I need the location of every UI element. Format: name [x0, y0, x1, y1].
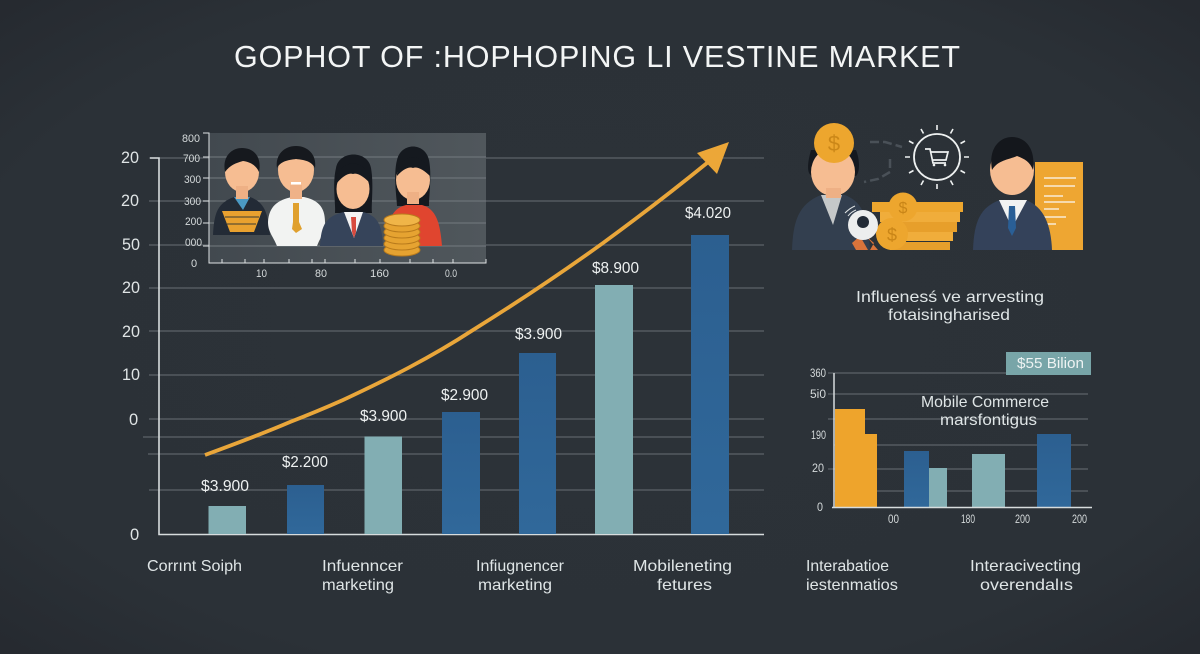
bar value labels: $4.020 — [685, 205, 731, 222]
inset axis labels: 200 — [185, 216, 202, 228]
growth arrow — [205, 142, 729, 455]
small chart axis labels: 200 — [1072, 514, 1087, 526]
category labels — [147, 558, 732, 594]
small chart category labels: iestenmatios — [806, 577, 898, 594]
illustration: investors and coins — [792, 123, 1083, 250]
gold stack: $ — [887, 225, 897, 245]
white badge — [845, 206, 878, 250]
inset axis labels — [182, 133, 457, 280]
inset axis labels: 000 — [185, 237, 202, 249]
bars — [208, 235, 729, 534]
small chart caption: marsfontigus — [940, 412, 1037, 429]
bar value labels: $3.900 — [360, 408, 407, 425]
category labels: marketing — [478, 577, 552, 594]
small chart caption — [921, 394, 1049, 429]
main bar chart — [121, 149, 764, 594]
small chart axis labels — [810, 368, 1087, 526]
y axis labels: 20 — [122, 323, 140, 341]
inset axis labels: 700 — [183, 153, 200, 165]
gold stack — [872, 192, 963, 250]
inset axis labels: 160 — [370, 268, 389, 280]
inset axis labels: 0 — [191, 258, 197, 270]
callout badge: $55 Bilion — [1017, 356, 1084, 372]
category labels: marketing — [322, 577, 394, 594]
y axis labels: 0 — [130, 526, 139, 544]
small chart axis labels: 200 — [1015, 514, 1030, 526]
category labels: Mobileneting — [633, 558, 732, 575]
bar value labels: $2.200 — [282, 454, 328, 471]
small chart category labels: Interacivecting — [970, 558, 1081, 575]
y axis labels — [121, 149, 140, 544]
bar value labels: $3.900 — [515, 326, 562, 343]
icon: shopping cart — [905, 125, 969, 189]
category labels: fetures — [657, 577, 712, 594]
small chart axis labels: 360 — [810, 368, 826, 380]
small chart axis labels: 5i0 — [810, 389, 826, 401]
inset axis labels: 0.0 — [445, 268, 457, 280]
small chart category labels: overendalıs — [980, 577, 1073, 594]
y axis labels: 20 — [122, 279, 140, 297]
bar value labels: $3.900 — [201, 478, 249, 495]
dollar coin above head: $ — [828, 131, 840, 156]
small chart axis labels: 0 — [817, 502, 823, 514]
gold stack: $ — [899, 200, 908, 217]
small chart axis labels: 190 — [811, 430, 826, 442]
category labels: Corrınt Soiph — [147, 558, 242, 575]
inset axis labels: 300 — [184, 196, 201, 208]
right caption — [856, 289, 1044, 324]
small chart category labels — [806, 558, 1081, 594]
coin stack — [384, 214, 420, 256]
inset chart: people — [182, 133, 486, 280]
person 1 — [213, 148, 270, 235]
bar value labels: $8.900 — [592, 260, 639, 277]
bar value labels — [201, 205, 731, 495]
right person — [973, 137, 1052, 250]
category labels: Infiugnencer — [476, 558, 565, 575]
dashed connector — [864, 142, 902, 182]
y axis labels: 20 — [121, 149, 139, 167]
person 3 — [320, 154, 383, 246]
right caption: Influenesś ve arrvesting — [856, 289, 1044, 306]
inset axis labels: 10 — [256, 268, 267, 280]
small chart axis labels: 00 — [888, 514, 899, 526]
inset axis labels: 300 — [184, 174, 201, 186]
inset axis labels: 80 — [315, 268, 327, 280]
small chart axis labels: 180 — [961, 514, 975, 526]
title: GOPHOT OF :HOPHOPING LI VESTINE MARKET — [234, 40, 960, 74]
small bar chart — [806, 352, 1092, 594]
callout badge — [1006, 352, 1091, 375]
right caption: fotaisingharised — [888, 307, 1010, 324]
small chart category labels: Interabatioe — [806, 558, 889, 575]
person 4 — [388, 146, 442, 246]
y axis labels: 10 — [122, 366, 140, 384]
y axis labels: 20 — [121, 192, 139, 210]
small chart axis labels: 20 — [812, 463, 824, 475]
y axis labels: 0 — [129, 411, 138, 429]
bar value labels: $2.900 — [441, 387, 488, 404]
small chart caption: Mobile Commerce — [921, 394, 1049, 411]
dollar coin above head — [814, 123, 854, 163]
left person — [792, 148, 870, 250]
y axis labels: 50 — [122, 236, 140, 254]
person 2 — [268, 146, 325, 246]
inset axis labels: 800 — [182, 133, 200, 145]
category labels: Infuenncer — [322, 558, 404, 575]
document — [1035, 162, 1083, 250]
small chart bars — [835, 409, 1071, 507]
